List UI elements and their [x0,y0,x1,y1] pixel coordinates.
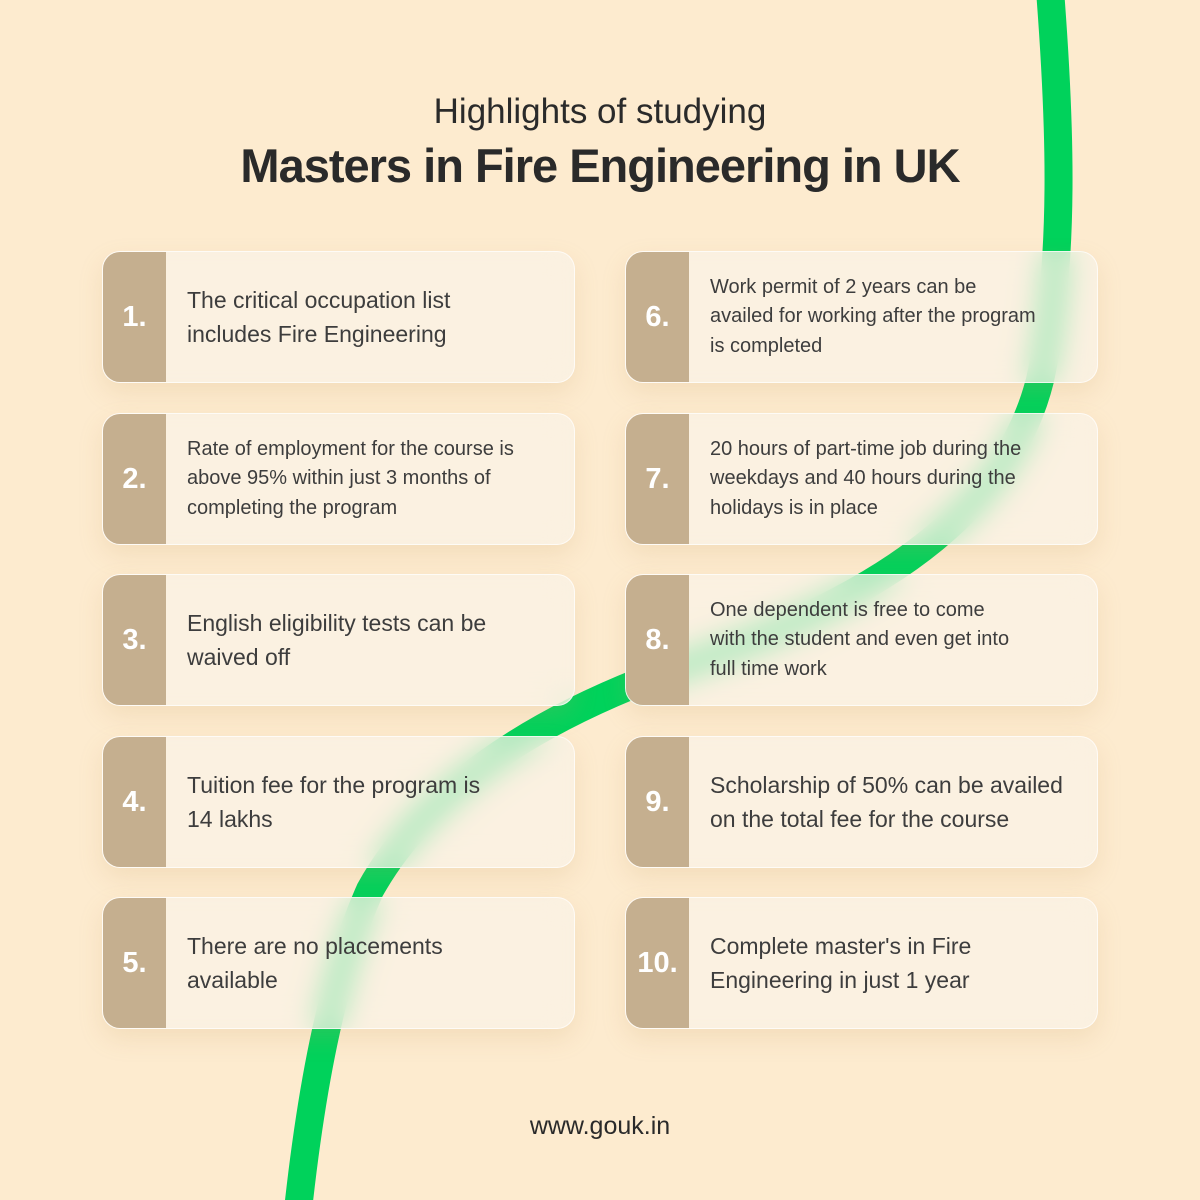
card 10 [625,897,1098,1029]
card 8 [625,574,1098,706]
card 5 [102,897,575,1029]
card 7: holidays is in place [710,497,878,519]
card 1: The critical occupation list [187,287,450,313]
card 9 [625,736,1098,868]
title: Highlights of studying [434,92,766,131]
card 2: 2. [122,462,147,494]
card 7: weekdays and 40 hours during the [710,467,1016,489]
card 1 [102,251,575,383]
card 7 [625,413,1098,545]
card 10: Engineering in just 1 year [710,967,970,993]
card 8: One dependent is free to come [710,599,985,621]
card 3: waived off [187,644,290,670]
card 4: 14 lakhs [187,806,273,832]
card 6: availed for working after the program [710,305,1036,327]
card 2: above 95% within just 3 months of [187,467,491,489]
card 10: Complete master's in Fire [710,933,971,959]
card 6: Work permit of 2 years can be [710,276,976,298]
card 1: includes Fire Engineering [187,321,447,347]
card 3: 3. [122,624,147,656]
card 10: 10. [637,946,678,978]
card 9: on the total fee for the course [710,806,1009,832]
card 2 [102,413,575,545]
card 4 [102,736,575,868]
card 8: with the student and even get into [710,628,1009,650]
title [240,92,960,192]
card 8: full time work [710,658,827,680]
card 5: There are no placements [187,933,443,959]
card 9: Scholarship of 50% can be availed [710,772,1063,798]
card 6 [625,251,1098,383]
card 9: 9. [645,786,670,818]
card 4: Tuition fee for the program is [187,772,480,798]
card 5: 5. [122,946,147,978]
card 7: 20 hours of part-time job during the [710,438,1021,460]
card 2: Rate of employment for the course is [187,438,514,460]
card 2: completing the program [187,497,397,519]
title: Masters in Fire Engineering in UK [240,139,960,192]
card 8: 8. [645,624,670,656]
card 3 [102,574,575,706]
card 1: 1. [122,300,147,332]
card 7: 7. [645,462,670,494]
footer url: www.gouk.in [530,1112,670,1140]
card 6: 6. [645,300,670,332]
card 6: is completed [710,335,822,357]
card 5: available [187,967,278,993]
card 4: 4. [122,786,147,818]
card 3: English eligibility tests can be [187,610,486,636]
